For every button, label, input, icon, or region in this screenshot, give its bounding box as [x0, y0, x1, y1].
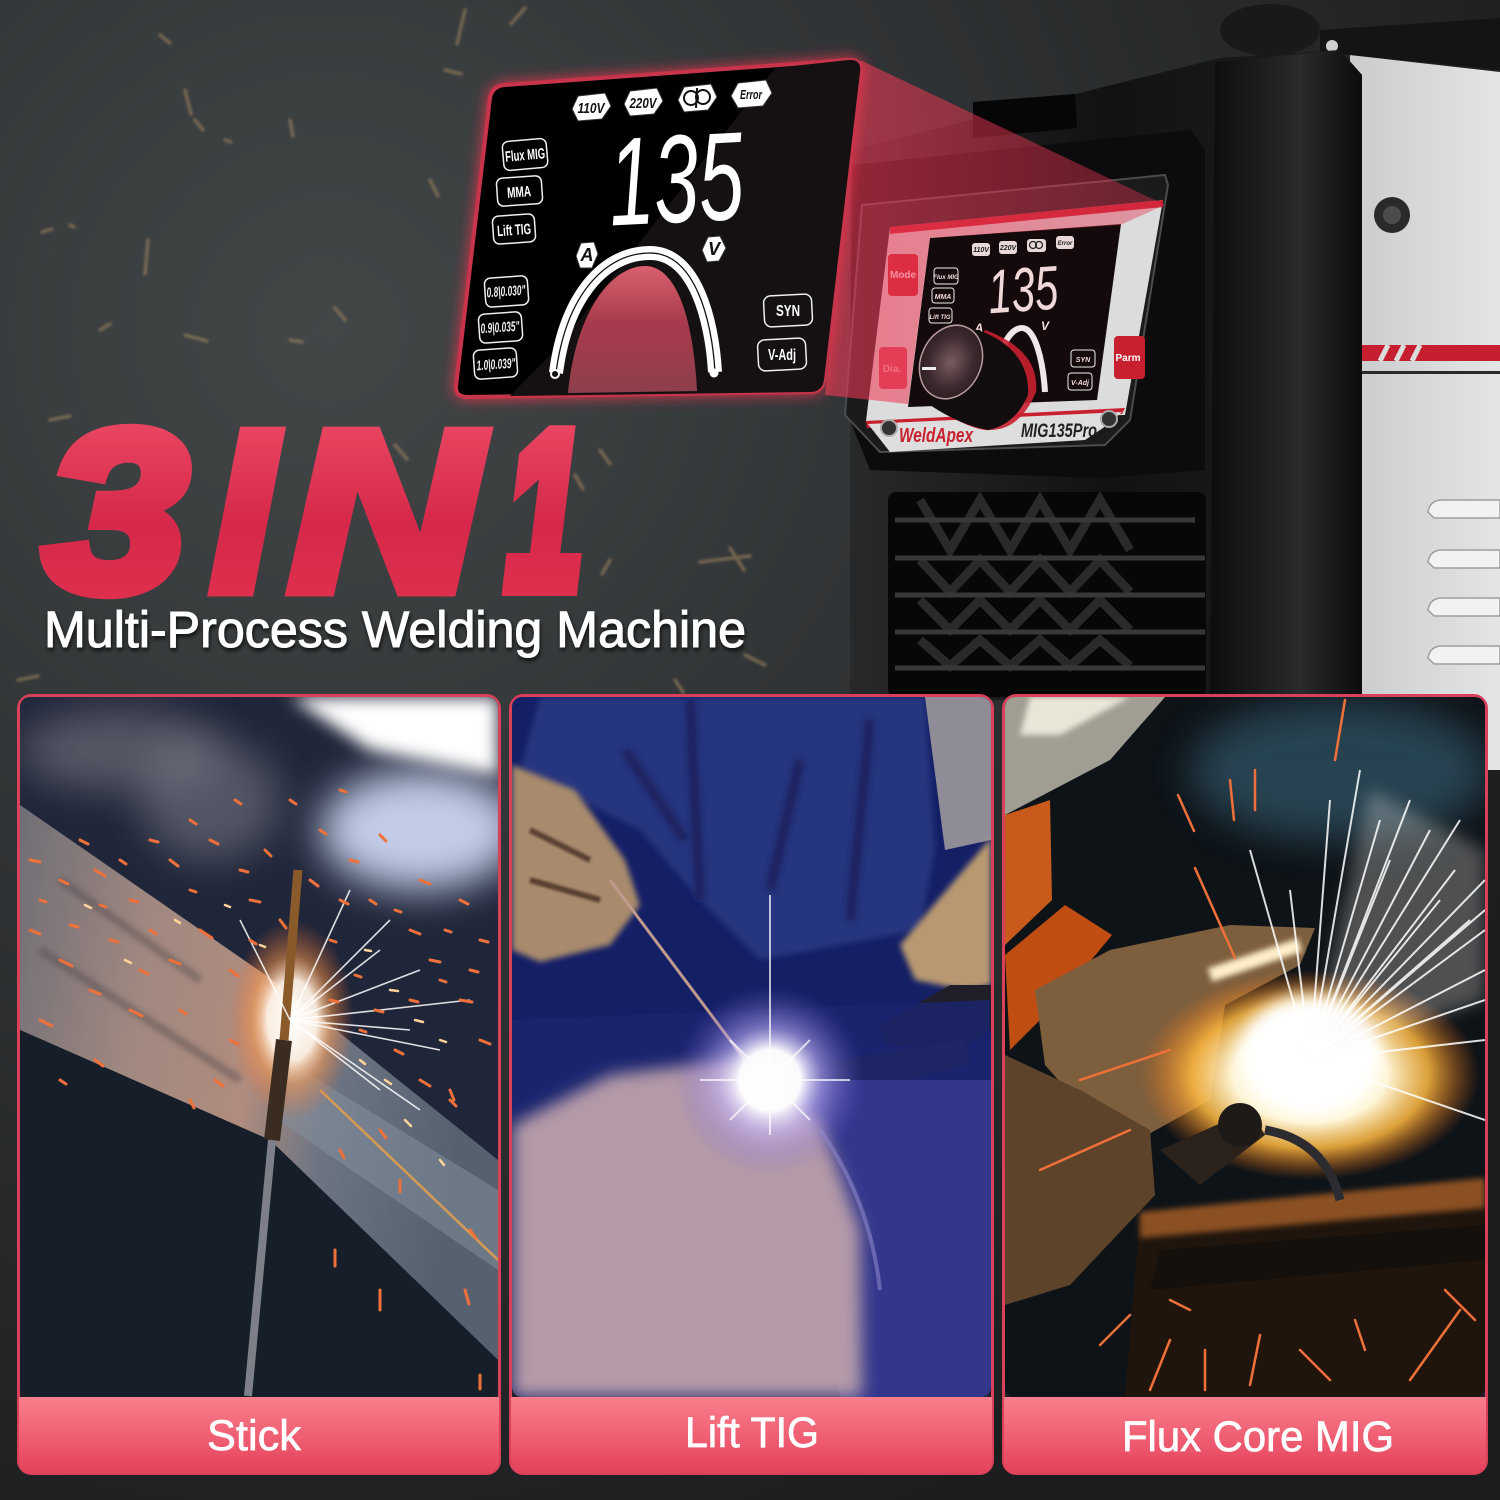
title: 3IN1	[45, 384, 583, 639]
buttons: Parm	[1115, 353, 1141, 364]
wire size boxes: 0.9|0.035"	[480, 318, 520, 336]
zoomed display	[456, 60, 860, 397]
panel: Lift TIG	[510, 696, 992, 1474]
small display text: Lift TIG	[930, 315, 951, 321]
stick welding photo	[20, 697, 520, 1397]
handle slot	[973, 94, 1077, 138]
small display text: 110V	[973, 247, 990, 254]
knob	[908, 315, 1036, 430]
panel recess	[850, 130, 1205, 478]
small display text: MMA	[935, 294, 951, 301]
mode boxes: MMA	[507, 183, 532, 202]
title: 3IN1: I	[211, 385, 279, 639]
panel: Flux Core MIG	[1004, 696, 1490, 1474]
mode boxes: Flux MIG	[504, 145, 546, 166]
small display text: Flux MIG	[933, 275, 959, 281]
A and V badges	[576, 236, 726, 268]
small display text: SYN	[1076, 357, 1091, 364]
buttons: Mode	[890, 270, 916, 281]
buttons: Dia.	[883, 364, 901, 375]
label: Stick: Stick	[207, 1412, 301, 1460]
machine top handle	[1220, 4, 1500, 70]
status badges: 110V	[578, 100, 606, 117]
status badges	[572, 80, 772, 121]
buttons	[879, 254, 1145, 389]
machine white side panel	[1350, 55, 1500, 770]
control panel: MIG135Pro	[1021, 421, 1097, 442]
small display text	[929, 236, 1095, 390]
wire size boxes: 1.0|0.039"	[476, 355, 516, 373]
mode boxes	[492, 138, 548, 244]
machine black front	[850, 50, 1362, 700]
small display text: V	[1041, 319, 1050, 333]
label: Flux Core MIG: Flux Core MIG	[1122, 1413, 1394, 1461]
function boxes	[757, 294, 813, 371]
small digits 135: 135	[986, 254, 1061, 327]
small display text: V-Adj	[1071, 380, 1090, 387]
mode boxes: Lift TIG	[497, 221, 532, 240]
panel: Stick	[18, 696, 520, 1474]
control panel	[845, 175, 1168, 452]
small display text: A	[974, 321, 983, 335]
label: Stick	[19, 1397, 499, 1473]
arc gauge	[551, 253, 718, 378]
label: Flux Core MIG	[1004, 1397, 1486, 1473]
small display	[908, 224, 1121, 407]
status badges: Error	[740, 87, 763, 102]
title: 3IN1: N	[289, 384, 485, 639]
title: 3IN1: 3	[45, 385, 187, 639]
welding machine	[825, 4, 1500, 770]
wire size boxes: 0.8|0.030"	[486, 282, 526, 300]
logos: WeldApex	[899, 425, 974, 447]
function boxes: V-Adj	[768, 347, 796, 364]
flux core welding photo	[1005, 697, 1490, 1397]
machine black corner column	[1210, 50, 1362, 700]
small display text: 220V	[999, 245, 1017, 252]
function boxes: SYN	[776, 303, 800, 320]
vent grille	[888, 492, 1206, 697]
title: 3IN1: 1	[506, 387, 583, 635]
A and V badges: A	[580, 245, 594, 265]
A and V badges: V	[708, 239, 722, 259]
small arc	[992, 328, 1045, 395]
TIG welding photo	[512, 697, 991, 1397]
status badges: 220V	[629, 95, 658, 112]
label: Lift TIG	[511, 1397, 992, 1473]
red projection beam	[825, 60, 1165, 404]
dome window	[568, 266, 697, 393]
label: Lift TIG: Lift TIG	[685, 1409, 819, 1457]
small display text: Error	[1058, 241, 1073, 247]
gloss reflection	[510, 60, 860, 396]
wire size boxes	[473, 275, 529, 380]
readout 135: 135	[605, 107, 747, 252]
subtitle: Multi-Process Welding Machine	[44, 601, 746, 658]
